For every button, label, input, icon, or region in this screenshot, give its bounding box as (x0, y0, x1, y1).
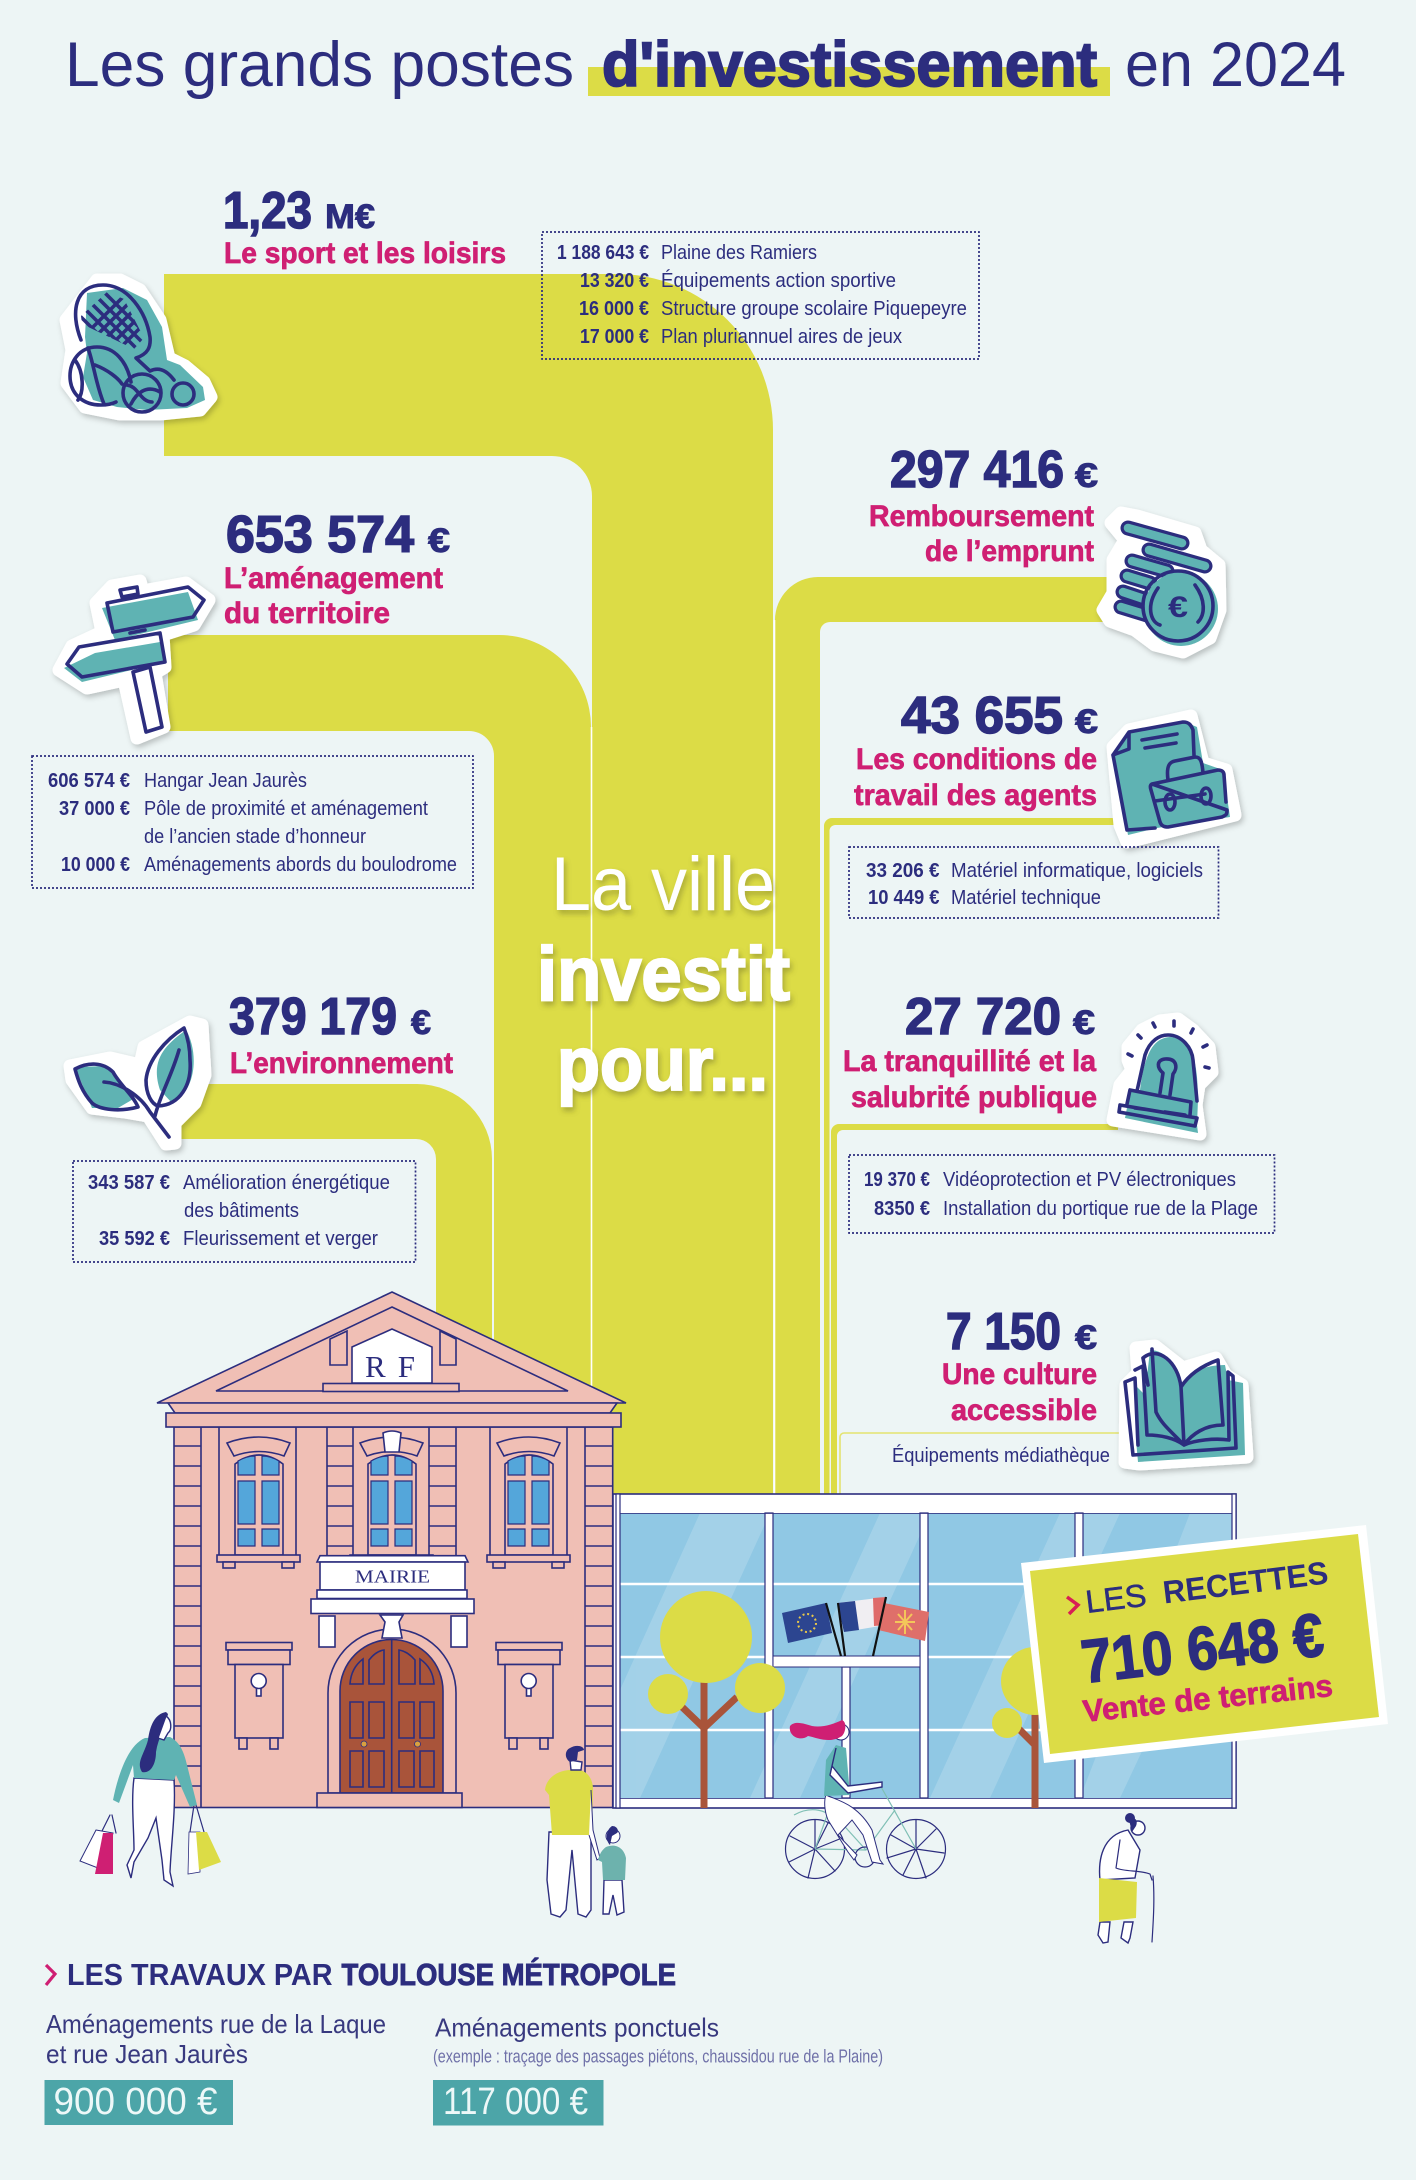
amount: sport (223, 182, 506, 270)
icon: document and briefcase (1113, 716, 1235, 842)
icon: coin stack: € (1168, 591, 1188, 624)
amount: conditions de travail: 43 655 (901, 687, 1063, 745)
detail box: tranquillité et salubrité: Vidéoprotection et PV électroniques (943, 1168, 1236, 1191)
amount: remboursement de l'emprunt: Remboursement (869, 500, 1094, 533)
icon: siren (1113, 1019, 1212, 1134)
detail box: sport: Plan pluriannuel aires de jeux (661, 325, 903, 348)
amount: environnement: 379 179 (229, 988, 397, 1046)
title: en 2024 (1125, 30, 1346, 100)
detail box: tranquillité et salubrité: 19 370 € (864, 1168, 930, 1191)
amount: environnement: L’environnement (230, 1047, 453, 1080)
detail box: territoire: 10 000 € (61, 853, 131, 876)
works: aménagements ponctuels: 117 000 € (443, 2081, 588, 2123)
amount: environnement (229, 988, 453, 1080)
amount: sport: 1,23 (223, 182, 312, 240)
detail box: conditions de travail: 33 206 € (866, 859, 940, 882)
detail box: environnement: Fleurissement et verger (183, 1227, 378, 1250)
detail box: conditions de travail: 10 449 € (868, 886, 940, 909)
central text: La ville investit pour: pour... (557, 1022, 768, 1107)
detail box: sport: 16 000 € (579, 297, 650, 320)
detail box: sport: 13 320 € (580, 269, 650, 292)
heading: les travaux par Toulouse Métropole (46, 1957, 676, 1992)
card: les recettes (1021, 1525, 1388, 1763)
amount: remboursement de l'emprunt (869, 441, 1098, 568)
card: les recettes: Vente de terrains (1081, 1668, 1334, 1729)
amount: tranquillité et salubrité: La tranquillité et la (843, 1045, 1097, 1078)
balcony with MAIRIE sign (311, 1556, 474, 1647)
detail box: territoire (32, 756, 473, 888)
amount: tranquillité et salubrité: 27 720 (905, 988, 1061, 1046)
detail box: sport: 1 188 643 € (557, 241, 650, 264)
amount: tranquillité et salubrité: salubrité publique (851, 1081, 1097, 1114)
amount: aménagement du territoire (224, 506, 450, 630)
central text: La ville investit pour: La ville (551, 842, 775, 927)
icon: racket and balls (54, 280, 211, 414)
amount: sport: M€ (325, 198, 375, 236)
detail box: sport: Équipements action sportive (661, 269, 896, 292)
amount: aménagement du territoire: du territoire (224, 597, 390, 630)
amount: tranquillité et salubrité: € (1073, 1004, 1095, 1042)
detail box: tranquillité et salubrité: Installation du portique rue de la Plage (943, 1197, 1258, 1220)
amount: tranquillité et salubrité (843, 988, 1097, 1114)
amount: remboursement de l'emprunt: de l’emprunt (925, 535, 1094, 568)
title (65, 30, 1346, 100)
works: rue de la Laque: 900 000 € (54, 2081, 218, 2123)
title: d'investissement (602, 30, 1097, 100)
flags (782, 1597, 929, 1656)
text: équipements médiathèque: Équipements médiathèque (892, 1444, 1110, 1467)
windows (217, 1437, 300, 1568)
works: aménagements ponctuels: (exemple : traçage des passages piétons, chaussidou rue de la Plaine) (433, 2046, 883, 2066)
amount: conditions de travail (854, 687, 1098, 812)
detail box: conditions de travail: Matériel informatique, logiciels (951, 859, 1203, 882)
amount: remboursement de l'emprunt: € (1075, 457, 1098, 495)
heading: les travaux par Toulouse Métropole: LES TRAVAUX PAR (67, 1957, 332, 1992)
door (317, 1615, 462, 1808)
detail box: sport (542, 232, 979, 359)
trees (648, 1591, 1069, 1808)
title: Les grands postes (65, 30, 574, 100)
detail box: sport: Plaine des Ramiers (661, 241, 817, 264)
central text: La ville investit pour (537, 842, 790, 1107)
wall (174, 1427, 613, 1808)
icon: plant (70, 1022, 205, 1144)
icon: signpost (59, 581, 209, 738)
amount: conditions de travail: € (1075, 703, 1098, 741)
detail box: environnement: 35 592 € (99, 1227, 171, 1250)
detail box: territoire: de l’ancien stade d’honneur (144, 825, 366, 848)
card: les recettes: RECETTES (1161, 1554, 1330, 1610)
detail box: conditions de travail (849, 847, 1218, 918)
pediment (157, 1292, 626, 1427)
amount: culture: Une culture (942, 1358, 1097, 1391)
amount: sport: Le sport et les loisirs (224, 237, 506, 270)
detail box: conditions de travail: Matériel technique (951, 886, 1101, 909)
card: les recettes: 710 648 € (1078, 1600, 1327, 1696)
pediment: R F (365, 1349, 415, 1384)
amount: conditions de travail: Les conditions de (856, 743, 1097, 776)
amount: culture: € (1075, 1319, 1097, 1357)
works: aménagements ponctuels (433, 2012, 883, 2126)
icon: open book (1125, 1346, 1247, 1464)
town hall (157, 1292, 626, 1808)
figure: woman with shopping bags (80, 1712, 221, 1886)
detail box: territoire: 606 574 € (48, 769, 131, 792)
figure: man and child (545, 1746, 626, 1917)
amount: aménagement du territoire: € (428, 522, 450, 560)
works: rue de la Laque: et rue Jean Jaurès (46, 2039, 248, 2069)
detail box: territoire: Hangar Jean Jaurès (144, 769, 307, 792)
glass building (613, 1494, 1236, 1808)
detail box: tranquillité et salubrité (849, 1155, 1274, 1233)
figure: cyclist (786, 1720, 946, 1878)
icon: coin stack (1103, 513, 1220, 652)
balcony with MAIRIE sign: MAIRIE (355, 1566, 430, 1586)
amount: environnement: € (411, 1004, 431, 1042)
amount: culture: accessible (951, 1394, 1097, 1427)
detail box: tranquillité et salubrité: 8350 € (874, 1197, 931, 1220)
detail box: sport: 17 000 € (580, 325, 650, 348)
detail box: territoire: Pôle de proximité et aménagement (144, 797, 428, 820)
wall niches (226, 1642, 292, 1749)
detail box: sport: Structure groupe scolaire Piquepeyre (661, 297, 967, 320)
amount: culture: 7 150 (946, 1303, 1061, 1361)
card: les recettes: LES (1083, 1577, 1148, 1620)
heading: les travaux par Toulouse Métropole: TOULOUSE MÉTROPOLE (342, 1957, 676, 1992)
works: rue de la Laque: Aménagements rue de la Laque (46, 2009, 386, 2039)
figure: old woman with cane (1098, 1813, 1154, 1943)
detail box: environnement: Amélioration énergétique (183, 1171, 390, 1194)
detail box: environnement: des bâtiments (184, 1199, 299, 1222)
amount: aménagement du territoire: 653 574 (226, 506, 414, 564)
central text: La ville investit pour: investit (537, 932, 790, 1017)
amount: remboursement de l'emprunt: 297 416 (890, 441, 1064, 499)
amount: culture (942, 1303, 1097, 1427)
detail box: territoire: 37 000 € (59, 797, 131, 820)
detail box: environnement: 343 587 € (88, 1171, 171, 1194)
detail box: territoire: Aménagements abords du boulodrome (144, 853, 457, 876)
investment flow pipes (164, 274, 1121, 1495)
amount: conditions de travail: travail des agents (854, 779, 1097, 812)
works: rue de la Laque (44, 2009, 386, 2125)
detail box: environnement (73, 1161, 416, 1262)
works: aménagements ponctuels: Aménagements ponctuels (435, 2012, 719, 2042)
amount: aménagement du territoire: L’aménagement (224, 562, 443, 595)
